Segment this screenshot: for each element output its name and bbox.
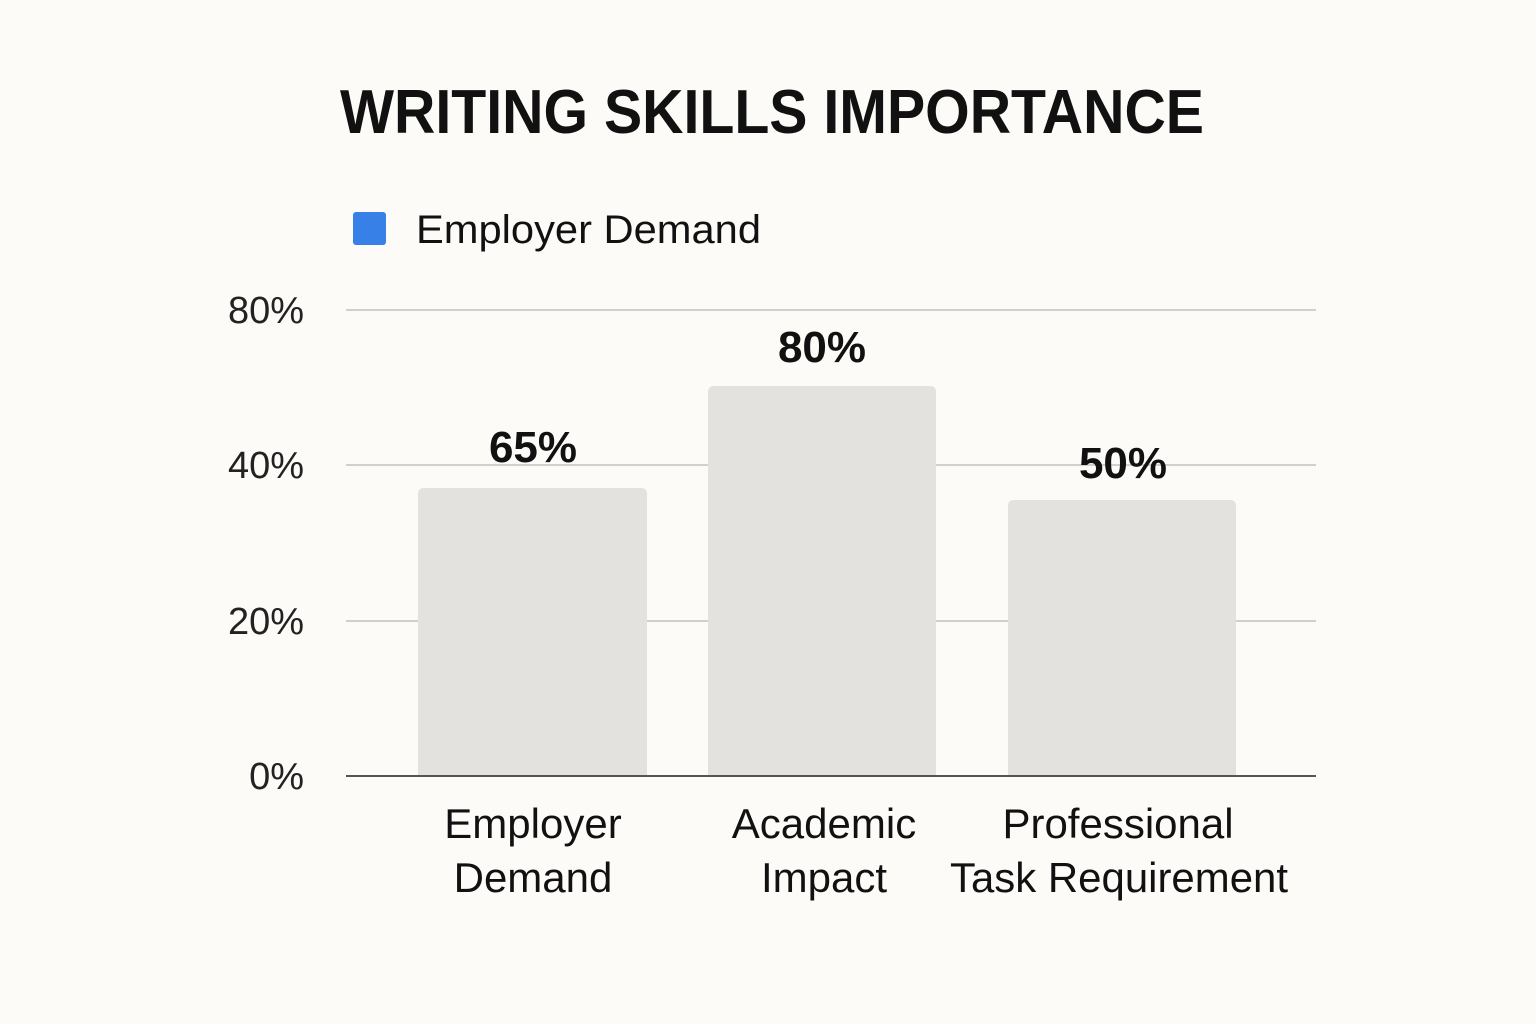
y axis labels [228, 290, 304, 798]
category labels: Professional [1002, 800, 1234, 847]
value labels: 65% [489, 423, 577, 472]
y axis labels: 0% [249, 756, 304, 798]
bar: academic impact [708, 386, 936, 775]
category labels: Demand [454, 854, 612, 901]
title: WRITING SKILLS IMPORTANCE [340, 78, 1204, 147]
y axis labels: 80% [228, 290, 304, 332]
category labels: Impact [761, 854, 887, 901]
category labels [444, 800, 1288, 901]
value labels [489, 323, 1167, 488]
category labels: Task Requirement [950, 854, 1288, 901]
y axis labels: 40% [228, 445, 304, 487]
value labels: 50% [1079, 439, 1167, 488]
bar: employer demand [418, 488, 647, 775]
bar chart [418, 386, 1236, 775]
y axis labels: 20% [228, 601, 304, 643]
legend: Employer Demand [416, 208, 761, 252]
bar: professional task requirement [1008, 500, 1236, 775]
category labels: Academic [732, 800, 916, 847]
value labels: 80% [778, 323, 866, 372]
category labels: Employer [444, 800, 622, 847]
